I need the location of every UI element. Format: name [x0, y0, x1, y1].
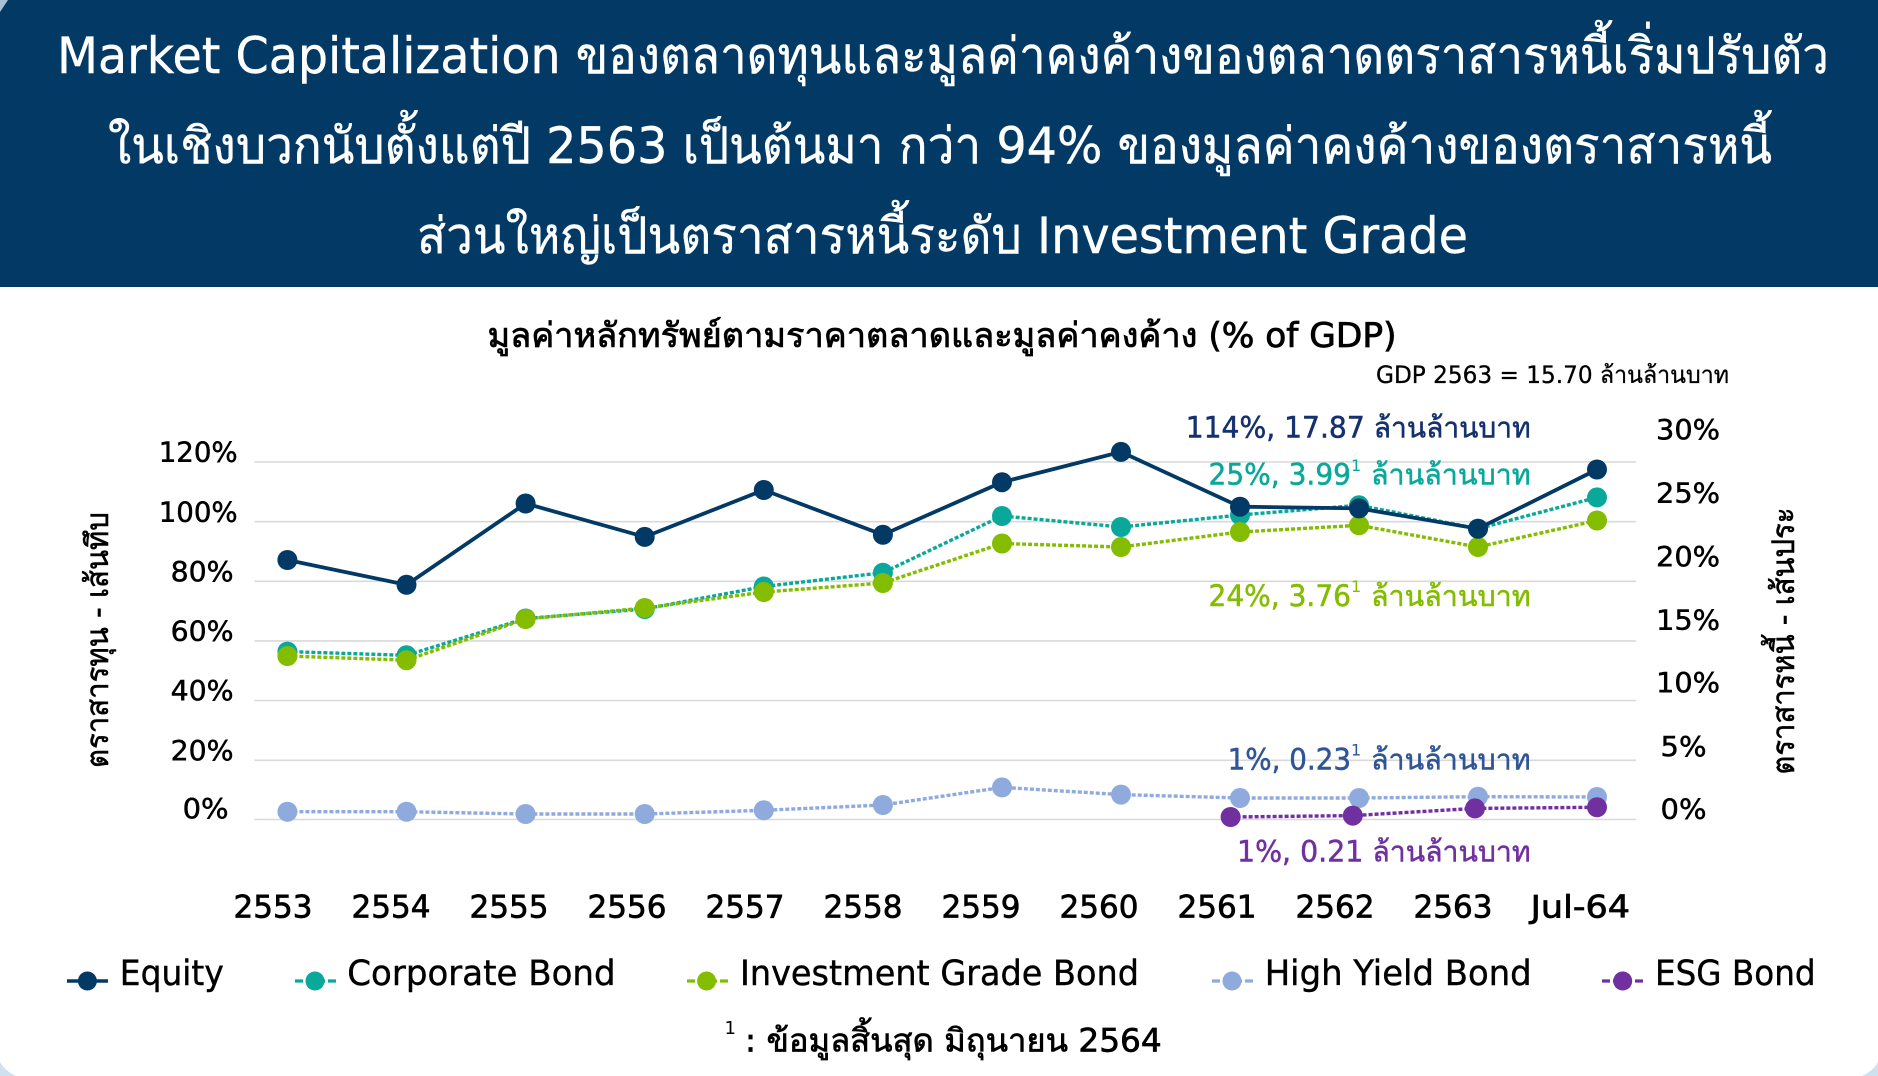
footnote: : ข้อมูลสิ้นสุด มิถุนายน 2564	[745, 1018, 1162, 1061]
callout: equity: 114%, 17.87 ล้านล้านบาท	[1186, 410, 1531, 444]
right axis labels: 30%	[1656, 413, 1720, 446]
title: ส่วนใหญ่เป็นตราสารหนี้ระดับ Investment Grade	[417, 200, 1468, 265]
title: ในเชิงบวกนับตั้งแต่ปี 2563 เป็นต้นมา กว่า 94% ของมูลค่าคงค้างของตราสารหนี้	[108, 110, 1772, 176]
x axis labels: 2558	[824, 890, 902, 926]
header banner	[0, 0, 1878, 287]
callout: investment grade bond: 24%, 3.76	[1208, 579, 1351, 613]
line chart	[254, 442, 1636, 827]
x axis labels: 2556	[588, 890, 666, 926]
footnote: 1	[724, 1018, 736, 1039]
title	[57, 20, 1829, 265]
left axis title: ตราสารทุน - เส้นทึบ	[80, 512, 117, 768]
x axis labels: 2563	[1414, 890, 1492, 926]
left axis labels: 0%	[183, 792, 229, 825]
callout: corporate bond: ล้านล้านบาท	[1371, 458, 1531, 492]
x axis labels	[234, 890, 1630, 926]
legend item: High Yield Bond: High Yield Bond	[1265, 954, 1532, 994]
right axis labels: 25%	[1656, 476, 1720, 510]
x axis labels: 2559	[942, 890, 1020, 926]
series: High Yield Bond	[277, 777, 1607, 824]
legend	[67, 954, 1816, 994]
left axis labels: 120%	[159, 436, 238, 468]
GDP note: GDP 2563 = 15.70 ล้านล้านบาท	[1376, 361, 1729, 389]
x axis labels: 2553	[234, 890, 312, 926]
left axis labels: 80%	[171, 555, 234, 588]
series: Equity	[277, 442, 1607, 595]
callout: investment grade bond	[1208, 577, 1531, 613]
callout: high yield bond: 1%, 0.23	[1228, 742, 1351, 776]
callout: ESG bond: 1%, 0.21 ล้านล้านบาท	[1237, 835, 1531, 869]
left axis labels: 60%	[171, 615, 234, 648]
right axis labels: 10%	[1656, 666, 1720, 699]
right axis labels	[1656, 413, 1720, 826]
legend item: ESG Bond: ESG Bond	[1655, 954, 1816, 994]
callout: high yield bond	[1228, 740, 1531, 776]
right axis labels: 15%	[1656, 604, 1720, 636]
x axis labels: Jul-64	[1528, 890, 1630, 926]
callout: corporate bond	[1208, 456, 1531, 492]
callout: corporate bond: 25%, 3.99	[1208, 458, 1351, 492]
series: ESG Bond	[1221, 797, 1607, 827]
left axis labels: 20%	[171, 734, 234, 767]
right axis title: ตราสารหนี้ - เส้นประ	[1761, 508, 1802, 775]
left axis labels: 100%	[159, 496, 238, 528]
legend item: Corporate Bond: Corporate Bond	[347, 954, 616, 994]
left axis labels	[159, 436, 238, 825]
x axis labels: 2561	[1178, 890, 1256, 926]
x axis labels: 2562	[1296, 890, 1374, 926]
right axis labels: 0%	[1660, 793, 1706, 826]
callout: high yield bond: ล้านล้านบาท	[1371, 742, 1531, 776]
legend item: Equity: Equity	[120, 954, 224, 994]
callout: investment grade bond: 1	[1351, 577, 1361, 596]
x axis labels: 2560	[1060, 890, 1138, 926]
legend item: Equity	[67, 954, 224, 994]
series: Corporate Bond	[277, 487, 1607, 665]
series: Investment Grade Bond	[277, 510, 1607, 670]
legend item: Investment Grade Bond: Investment Grade Bond	[740, 954, 1139, 994]
x axis labels: 2557	[706, 890, 784, 926]
x axis labels: 2554	[352, 890, 430, 926]
callout: investment grade bond: ล้านล้านบาท	[1371, 579, 1531, 613]
chart title: มูลค่าหลักทรัพย์ตามราคาตลาดและมูลค่าคงค้าง (% of GDP)	[488, 316, 1396, 356]
right axis labels: 5%	[1660, 730, 1706, 763]
left axis labels: 40%	[171, 674, 234, 707]
callout: corporate bond: 1	[1351, 456, 1361, 475]
x axis labels: 2555	[470, 890, 548, 926]
title: Market Capitalization ของตลาดทุนและมูลค่าคงค้างของตลาดตราสารหนี้เริ่มปรับตัว	[57, 20, 1829, 86]
callout: high yield bond: 1	[1351, 740, 1361, 760]
right axis labels: 20%	[1656, 540, 1720, 573]
